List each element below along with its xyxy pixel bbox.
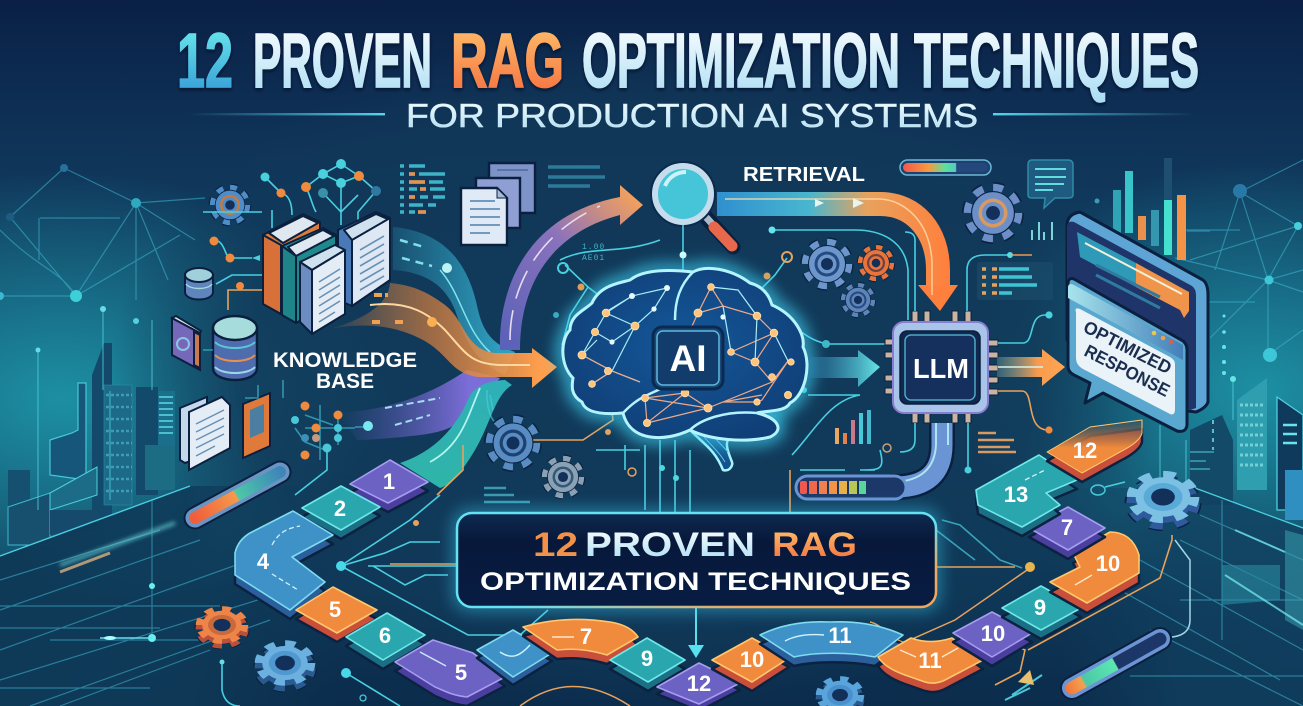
book blue [338,212,390,306]
tile 9 right: 9 [1034,595,1046,620]
background city right [1160,314,1303,520]
small database icon [185,268,213,300]
title word optimization: OPTIMIZATION [582,18,900,104]
left progress bar [195,472,280,518]
mini bars [1032,222,1052,240]
bottom-left document icon [180,397,230,470]
small numeric label [582,243,605,263]
center box [457,513,936,607]
tile 1: 1 [383,469,395,494]
large database icon [213,316,257,380]
llm chip: LLM [913,353,969,384]
title [177,18,1199,104]
back panel [1067,212,1208,412]
chip connectors [860,232,1053,474]
tile 12 purple [657,663,740,706]
connector orange dots [203,210,272,310]
bottom left traces [220,660,630,706]
tile 5 orange: 5 [329,597,341,622]
small numeric label: 1.00 [582,243,605,252]
chat bubble icon [1028,160,1073,208]
path tiles [235,420,1142,706]
tile 7 arc: 7 [580,624,592,649]
tile 11 blue arc [760,622,903,666]
center box glow [452,508,941,612]
lower gear by brain [490,420,536,466]
magnifier [650,161,733,247]
title word RAG: RAG [451,18,564,104]
tile 4: 4 [257,549,270,574]
center box line one: PROVEN [585,526,755,564]
node cluster icon [291,402,373,495]
front bubble: RESPONSE [1081,341,1173,401]
subtitle rule left [188,113,385,115]
front bubble [1068,279,1187,431]
progress bar top [900,160,991,175]
center box connectors [336,445,1172,685]
side text lines [548,167,605,186]
tile 10 orange: 10 [740,647,764,672]
title word proven: PROVEN [253,18,432,104]
ribbon: purple stream [337,370,500,440]
orange gear [200,609,244,646]
brain [563,268,807,470]
tile 12 orange [1047,420,1142,482]
tile 6: 6 [379,623,391,648]
tile 11 orange: 11 [918,648,942,673]
center box line one: RAG [772,526,857,564]
title number: 12 [177,18,233,104]
bar chart [1113,158,1186,260]
ai badge [653,327,723,389]
bottom gear [819,679,861,706]
ribbon: blue stream [393,227,515,375]
tile 1 [350,460,428,512]
book orange [263,214,320,314]
center box line two: OPTIMIZATION TECHNIQUES [480,568,911,596]
chip pins [885,311,998,423]
subtitle rule right [993,113,1195,115]
tile 10 big orange: 10 [1096,551,1120,576]
llm list panel [977,262,1053,300]
knowledge base label: KNOWLEDGE [273,349,417,372]
tile 10 big orange [1050,532,1139,613]
ai badge: AI [670,338,706,379]
ribbon: teal stream [400,380,512,488]
tile 5 orange [296,587,377,642]
tile 7 arc [523,619,638,664]
retrieval label: RETRIEVAL [743,164,865,186]
knowledge base label: BASE [316,370,374,393]
tile 5 purple [395,640,505,706]
small legend lines [484,488,530,502]
top data network icon [260,159,381,225]
center box line one [533,526,857,564]
brain network nodes [578,284,794,427]
connector lines left [203,350,500,425]
tile 9 left [610,638,685,691]
background ground grid left [0,486,340,706]
tile 6 [346,613,425,669]
blue gear bottom left [259,644,311,688]
retrieval arrow [717,198,958,311]
tile 11 blue arc: 11 [828,623,852,648]
blank blue tile [477,630,552,685]
gear orange [861,248,891,278]
right gear icon [968,188,1018,238]
small grey gear [545,459,581,495]
book white [300,245,345,334]
text lines near chip [978,433,1016,452]
bottom arrows [1005,670,1042,700]
brain stem [690,430,733,470]
gears by llm [806,242,891,315]
tile 10 orange [712,638,789,691]
tile 2 [302,486,380,539]
background network right [1094,160,1303,362]
gear large blue [806,242,848,286]
books [263,212,390,334]
arrow llm to response [997,349,1065,386]
brain network lines [582,288,667,384]
small numeric label: AE01 [582,254,605,263]
code lines icon [400,166,445,212]
subtitle: FOR PRODUCTION AI SYSTEMS [406,97,978,134]
document stack icon [461,163,535,245]
big right gear [1132,475,1194,526]
background city left [8,306,175,545]
segmented progress bar [796,476,906,499]
front bubble: OPTIMIZED [1080,317,1175,378]
center box line one: 12 [533,526,578,564]
brain outline [563,268,807,440]
llm chip [885,311,998,423]
small chart under brain [835,410,871,444]
right gear connector [1172,540,1190,637]
tile 7 right: 7 [1061,515,1073,540]
tile 9 right [1002,586,1081,639]
tile 10 purple [953,612,1032,666]
tile 11 orange [878,638,983,692]
right progress bar [1072,639,1160,688]
gear small blue [843,285,873,315]
tile 12 purple: 12 [687,671,711,696]
small book icon [172,316,201,370]
arch arrow to retrieval [500,185,643,350]
orange card icon [243,393,270,458]
tile 9 left: 9 [641,646,653,671]
top-left gear icon [213,188,247,222]
tile 12 orange: 12 [1073,438,1097,463]
ribbon: orange stream arrow [313,283,557,388]
target connector icon [1091,482,1125,495]
tile 7 right [1029,507,1105,559]
tile 4 [235,511,333,619]
circuit traces around brain [520,225,908,512]
brain folds [623,272,757,430]
book teal [282,228,336,323]
tube from chip to progress bar [890,423,942,487]
tile 10 purple: 10 [981,621,1005,646]
arrow brain to llm [810,350,880,387]
background ground grid right [1060,488,1303,706]
tile 2: 2 [334,496,346,521]
brain glow [563,268,807,440]
tile 13: 13 [1004,482,1028,507]
optimized response panels [1067,212,1208,431]
tile 5 purple: 5 [455,660,467,685]
background network left [0,164,205,302]
knowledge base label [273,349,417,393]
tile 13 [976,455,1077,536]
